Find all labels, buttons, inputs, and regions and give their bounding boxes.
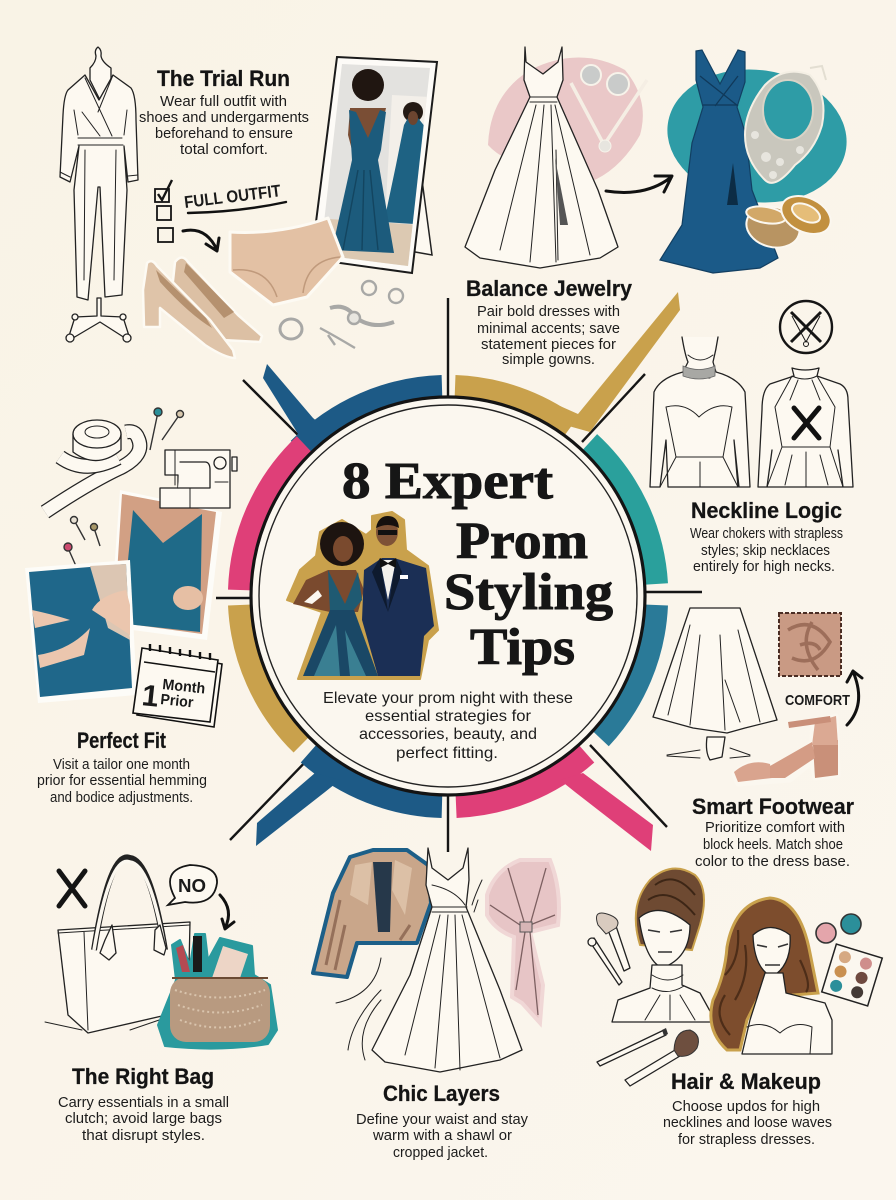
panel: the trial run	[60, 47, 437, 358]
arrow	[220, 895, 234, 929]
icon: waves woman	[711, 898, 832, 1054]
icon: underwear	[230, 218, 343, 305]
teal blob	[659, 58, 855, 214]
centre disc	[251, 397, 645, 795]
icon: block-heel sandal	[734, 716, 838, 784]
description: block heels. Match shoe	[703, 837, 843, 853]
heading: Balance Jewelry	[466, 276, 633, 301]
description: shoes and undergarments	[139, 110, 309, 126]
icon: heels	[143, 258, 262, 358]
description: color to the dress base.	[695, 854, 850, 870]
icon: gold bangles	[742, 189, 837, 253]
icon: white gown	[372, 848, 522, 1072]
heading: Smart Footwear	[692, 794, 854, 819]
title: Styling	[444, 564, 613, 621]
icon: measuring tape	[45, 420, 140, 512]
description	[663, 1099, 832, 1148]
description	[695, 820, 850, 870]
panel: balance jewelry	[465, 47, 855, 368]
panel: hair and makeup	[588, 869, 882, 1148]
arc: gold left	[240, 605, 302, 744]
icon: tote bag	[45, 857, 190, 1033]
pink blob	[488, 58, 643, 182]
panel: smart footwear	[653, 608, 862, 870]
icon: strapless bust with choker	[650, 337, 750, 487]
icon: mannequin with jumpsuit	[60, 47, 138, 342]
arc: pink bottom right	[456, 752, 653, 851]
panel: neckline logic	[650, 301, 853, 575]
icon: calendar: Prior	[160, 691, 194, 711]
description	[37, 757, 207, 806]
mirror	[315, 57, 437, 280]
woman back view	[348, 108, 386, 148]
icon: clutch with items	[158, 934, 277, 1049]
heading: Perfect Fit	[77, 728, 167, 753]
description: and bodice adjustments.	[50, 790, 193, 806]
icon: brushes	[588, 913, 698, 1086]
gold outline	[287, 512, 438, 679]
heading: The Right Bag	[72, 1064, 214, 1089]
description	[139, 94, 309, 158]
icon: pink shawl	[487, 860, 559, 1023]
comfort label: COMFORT	[785, 692, 850, 709]
icon: calendar: Month	[162, 676, 206, 697]
icon: X mark	[59, 871, 85, 906]
woman reflection	[403, 102, 423, 122]
intro text	[323, 690, 573, 762]
panel: perfect fit	[25, 408, 237, 806]
description: necklines and loose waves	[663, 1115, 832, 1131]
heading: Hair & Makeup	[671, 1069, 821, 1094]
intro text: perfect fitting.	[396, 745, 498, 762]
woman	[293, 522, 378, 676]
icon: eyeshadow palette	[822, 944, 882, 1006]
icon: statement necklace	[745, 66, 826, 183]
arc: navy bottom left	[256, 752, 442, 846]
spokes	[216, 298, 702, 852]
arrow	[606, 176, 672, 192]
title: Tips	[470, 619, 575, 676]
description: Define your waist and stay	[356, 1112, 529, 1128]
icon: motion lines	[336, 880, 482, 1060]
icon: calendar	[133, 644, 222, 727]
icon: fabric swatch	[779, 613, 841, 676]
description: that disrupt styles.	[82, 1128, 205, 1144]
man	[362, 516, 434, 676]
icon: pins	[64, 408, 184, 566]
description	[356, 1112, 529, 1161]
icon: calendar: 1	[140, 679, 160, 714]
handwritten label: FULL OUTFIT	[183, 181, 282, 212]
description: Carry essentials in a small	[58, 1095, 229, 1111]
icon: speech bubble	[168, 865, 217, 905]
description: simple gowns.	[502, 352, 595, 368]
icon: updo woman	[612, 869, 716, 1022]
icon: sewing machine	[160, 450, 237, 508]
icon: speech bubble: NO	[178, 876, 206, 896]
icon: navy gown	[660, 50, 778, 273]
description: clutch; avoid large bags	[65, 1111, 222, 1127]
description: for strapless dresses.	[678, 1132, 815, 1148]
description: Choose updos for high	[672, 1099, 820, 1115]
description: total comfort.	[180, 142, 268, 158]
arc: pink left	[240, 445, 305, 590]
description: styles; skip necklaces	[701, 543, 830, 559]
description	[477, 304, 620, 368]
description: Visit a tailor one month	[53, 757, 190, 773]
icon: halter bust	[758, 368, 853, 487]
icon: crossed necklace	[780, 301, 832, 353]
description: Prioritize comfort with	[705, 820, 845, 836]
description: minimal accents; save	[477, 321, 620, 337]
description: Pair bold dresses with	[477, 304, 620, 320]
title: 8 Expert	[342, 453, 554, 510]
heading: The Trial Run	[157, 66, 290, 91]
description: entirely for high necks.	[693, 559, 835, 575]
intro text: essential strategies for	[365, 708, 532, 725]
panel: the right bag	[45, 857, 277, 1144]
icon: white gown sketch	[465, 47, 618, 268]
couple photo	[287, 512, 438, 679]
arc: teal right	[589, 443, 656, 584]
photo: dress fitting	[110, 490, 222, 640]
arc: blue right	[600, 605, 656, 738]
checklist	[155, 180, 173, 242]
description: Wear chokers with strapless	[690, 526, 843, 542]
icon: cosmetic pots	[816, 914, 861, 943]
icon: skirt sketch	[653, 608, 777, 760]
description	[690, 526, 843, 575]
intro text: Elevate your prom night with these	[323, 690, 573, 707]
icon: earrings and necklace	[571, 65, 647, 152]
arc: gold top right	[455, 292, 680, 432]
icon: silver jewelry	[280, 281, 403, 348]
description: beforehand to ensure	[155, 126, 293, 142]
arrow	[183, 230, 219, 251]
description: Wear full outfit with	[160, 94, 287, 110]
panel: chic layers	[313, 848, 559, 1161]
description: statement pieces for	[481, 337, 616, 353]
intro text: accessories, beauty, and	[359, 726, 537, 743]
description	[58, 1095, 229, 1144]
description: warm with a shawl or	[372, 1128, 512, 1144]
arrow	[847, 671, 862, 725]
arc: navy top left	[263, 364, 442, 450]
title: Prom	[456, 513, 588, 570]
heading: Neckline Logic	[691, 498, 842, 523]
heading: Chic Layers	[383, 1081, 500, 1106]
photo: pinning dress	[25, 560, 137, 703]
central hub ring	[216, 292, 702, 852]
icon: fur jacket	[313, 850, 431, 977]
description: prior for essential hemming	[37, 773, 207, 789]
title	[342, 453, 613, 676]
description: cropped jacket.	[393, 1145, 488, 1161]
